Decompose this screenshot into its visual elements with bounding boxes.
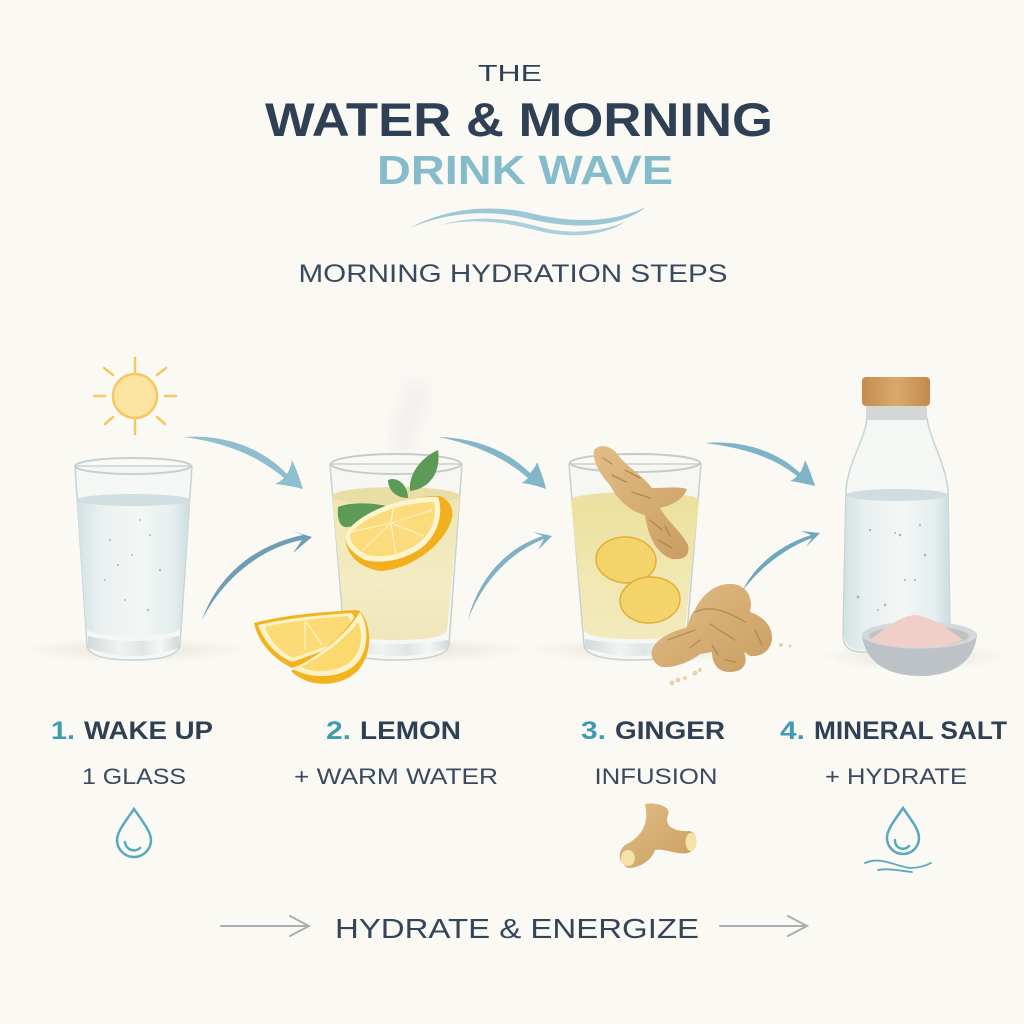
- decorative wave under title: [408, 207, 646, 235]
- icon: ginger: [620, 803, 696, 868]
- steam: [402, 390, 417, 446]
- bottle cork: [862, 377, 930, 406]
- step 1 sublabel: 1 GLASS: [82, 764, 186, 789]
- step 2 sublabel: + WARM WATER: [294, 764, 498, 789]
- icon: mint leaves: [338, 450, 439, 527]
- step 4 label: MINERAL SALT: [814, 717, 1007, 745]
- step 1 label: 1.: [51, 717, 75, 745]
- ginger slices: [594, 535, 682, 625]
- icon: sun: [94, 358, 176, 434]
- title: [265, 60, 773, 193]
- title: WATER & MORNING: [265, 93, 773, 146]
- step 3 glass: [525, 446, 775, 663]
- lemon wedges: [254, 610, 369, 684]
- step 1 label: WAKE UP: [84, 717, 213, 745]
- arrow: step 1 to 2 top: [183, 437, 303, 489]
- step 2 label: 2.: [326, 717, 351, 745]
- footer arrow left: [221, 916, 309, 936]
- arrow: step 1 to 2 lower: [202, 531, 312, 620]
- step 3 sublabel: INFUSION: [594, 764, 718, 789]
- step 4 label: 4.: [780, 717, 805, 745]
- arrow: step 3 to 4 lower: [743, 531, 820, 590]
- salt bowl: [862, 615, 977, 676]
- icon: water drop: [117, 809, 151, 857]
- ginger crumbs: [670, 643, 792, 686]
- arrow: step 3 to 4 top: [705, 443, 815, 486]
- title: THE: [478, 60, 542, 86]
- icon: water drop with wave: [865, 808, 931, 872]
- subtitle: MORNING HYDRATION STEPS: [298, 260, 728, 288]
- ginger in glass: [594, 446, 688, 559]
- arrow: step 2 to 3 lower: [468, 532, 552, 620]
- footer text: HYDRATE & ENERGIZE: [335, 913, 699, 944]
- step 2 glass: [290, 450, 530, 663]
- step 3 label: [581, 717, 725, 745]
- title: DRINK WAVE: [377, 147, 673, 193]
- step 4 bottle: [820, 377, 1010, 671]
- step 3 label: GINGER: [615, 717, 725, 745]
- step 2 label: LEMON: [360, 717, 461, 745]
- footer arrow right: [720, 916, 807, 936]
- step 1 glass: [20, 458, 250, 663]
- ginger root beside glass: [652, 584, 772, 672]
- lemon slice in glass: [345, 496, 452, 571]
- arrow: step 2 to 3 top: [438, 437, 546, 489]
- step 4 sublabel: + HYDRATE: [825, 764, 967, 789]
- step 2 label: [326, 717, 461, 745]
- bottle neck band: [866, 405, 927, 420]
- step 3 label: 3.: [581, 717, 606, 745]
